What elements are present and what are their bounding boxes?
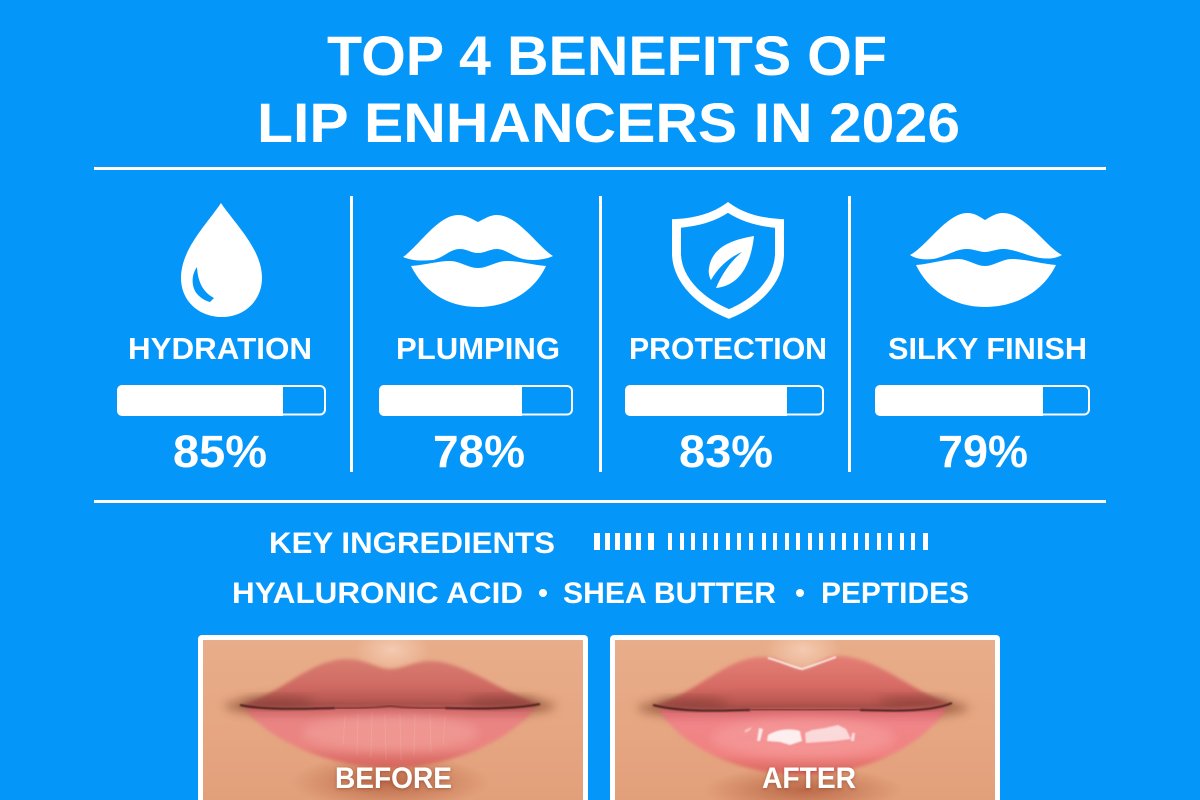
label: after: AFTER	[762, 762, 856, 795]
progress bar: 85%	[117, 385, 325, 416]
photo: lips after	[615, 626, 995, 800]
label: plumping: PLUMPING	[396, 331, 560, 366]
progress bar: 78%	[379, 385, 572, 416]
ingredient list: SHEA BUTTER	[563, 577, 776, 610]
heading: key ingredients: KEY INGREDIENTS	[269, 527, 555, 560]
gloss highlights	[745, 657, 855, 745]
panel: silky finish	[875, 213, 1089, 477]
ingredient list	[232, 577, 969, 610]
panel: protection	[625, 208, 827, 477]
panel: plumping	[379, 215, 572, 477]
value: 79%: 79%	[938, 426, 1028, 477]
progress bar: 83%	[625, 385, 823, 416]
title: LIP ENHANCERS IN 2026	[257, 91, 960, 154]
label: before: BEFORE	[335, 762, 452, 795]
title	[257, 24, 960, 154]
icon: lips	[403, 215, 553, 307]
title: TOP 4 BENEFITS OF	[327, 24, 887, 87]
progress bar: 79%	[875, 385, 1089, 416]
photo: lips before	[203, 626, 583, 800]
panel: before photo	[198, 626, 588, 800]
icon: lips	[910, 213, 1062, 307]
barcode tick decoration	[594, 533, 928, 550]
ingredient list: HYALURONIC ACID	[232, 577, 523, 610]
icon: water drop	[181, 203, 262, 317]
value: 83%: 83%	[679, 426, 773, 477]
icon: shield with leaf	[676, 208, 780, 314]
ingredient list: PEPTIDES	[821, 577, 969, 610]
label: protection: PROTECTION	[629, 331, 827, 366]
panel: after photo	[610, 626, 1000, 800]
panel: hydration	[117, 203, 325, 477]
label: hydration: HYDRATION	[128, 331, 312, 366]
value: 85%: 85%	[173, 426, 267, 477]
label: silky finish: SILKY FINISH	[888, 331, 1087, 366]
value: 78%: 78%	[433, 426, 525, 477]
